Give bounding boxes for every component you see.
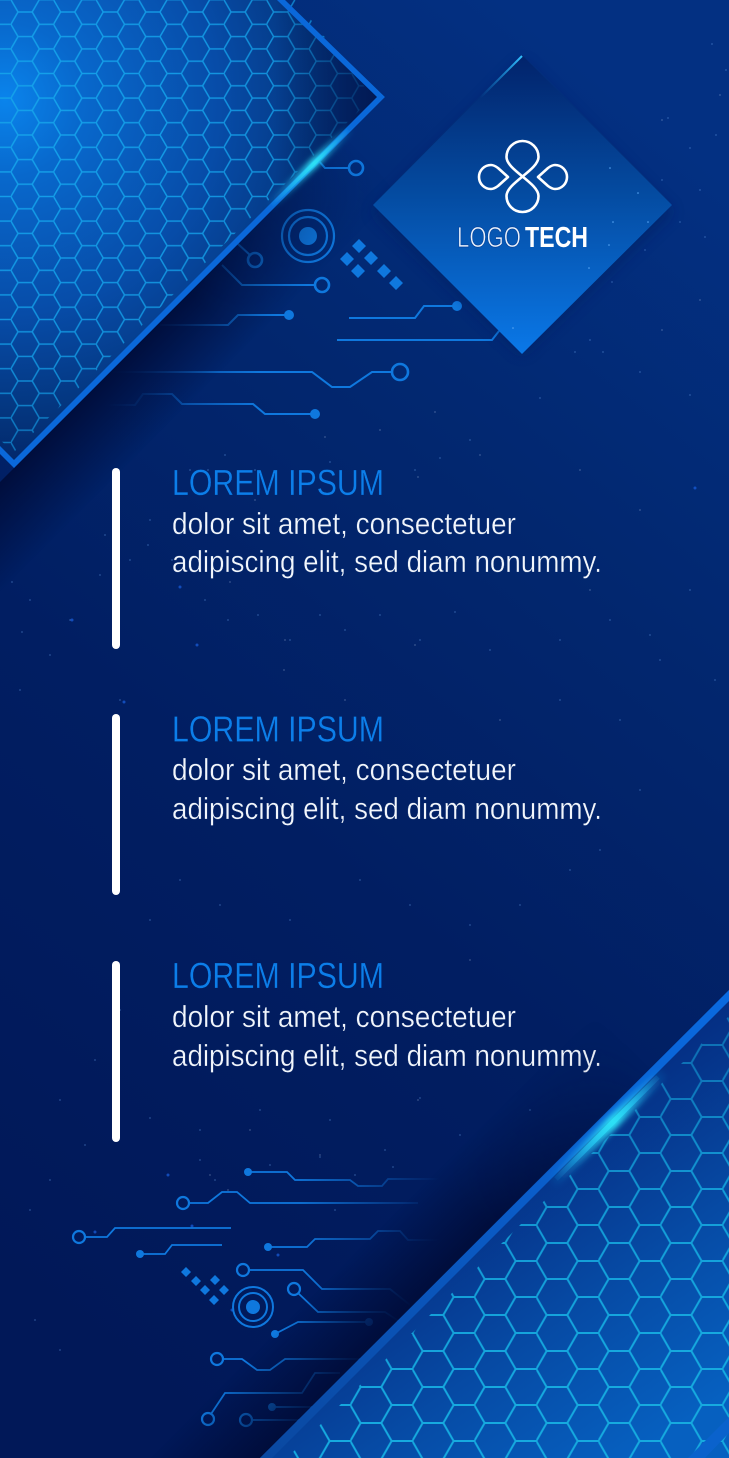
trace b2 xyxy=(177,1192,418,1209)
trace b5 xyxy=(264,1231,450,1251)
panel frame xyxy=(0,0,385,468)
trace b3 xyxy=(73,1228,231,1243)
bottom panel frame xyxy=(260,990,729,1458)
trace: long dot xyxy=(100,394,320,419)
trace b8 xyxy=(271,1318,373,1338)
icon: diamond dots xyxy=(340,239,403,290)
logo wordmark: TECH xyxy=(525,222,588,254)
trace b9 xyxy=(211,1353,360,1370)
heading 2: LOREM IPSUM xyxy=(172,708,384,750)
trace: ring right of glow xyxy=(318,160,363,175)
edge glow xyxy=(268,126,352,208)
divider bar 1 xyxy=(112,468,120,649)
divider bar 2 xyxy=(112,714,120,895)
trace b10 xyxy=(202,1373,340,1425)
panel: bottom-right hexagon corner xyxy=(260,990,729,1458)
icon: bottom diamond dots xyxy=(181,1267,229,1305)
divider bar 3 xyxy=(112,961,120,1142)
hexagon mesh xyxy=(0,0,373,452)
trace: dot by logo xyxy=(349,301,462,318)
trace b11 xyxy=(268,1403,312,1411)
logo panel stars xyxy=(513,168,648,328)
trace: ring lower xyxy=(222,265,329,292)
section 1 xyxy=(112,462,602,649)
heading 3: LOREM IPSUM xyxy=(172,955,384,996)
trace: long ring xyxy=(110,364,408,387)
trace: short ring xyxy=(238,244,262,267)
trace b4 xyxy=(136,1245,222,1258)
body 3: dolor sit amet, consectetuer xyxy=(172,999,516,1034)
trace: dot left xyxy=(160,310,294,325)
bottom edge glow xyxy=(550,1070,665,1185)
trace b1 xyxy=(244,1168,450,1186)
icon: bottom target rings xyxy=(233,1287,273,1327)
right corner darkening xyxy=(275,0,385,207)
heading 1: LOREM IPSUM xyxy=(172,462,384,503)
body 1: adipiscing elit, sed diam nonummy. xyxy=(172,544,602,579)
bottom hexagon mesh xyxy=(287,1016,729,1458)
logo wordmark: LOGO xyxy=(457,222,521,254)
body 2: adipiscing elit, sed diam nonummy. xyxy=(172,791,602,826)
bottom-right panel shadow xyxy=(180,1050,616,1458)
trace: line under logo xyxy=(337,331,499,340)
trace b7 xyxy=(288,1283,400,1322)
bottom circuit traces xyxy=(73,1168,450,1426)
icon: logo knot xyxy=(479,141,567,212)
panel: top-left hexagon diamond xyxy=(0,0,385,468)
body 3: adipiscing elit, sed diam nonummy. xyxy=(172,1038,602,1073)
top-left panel shadow xyxy=(0,162,354,570)
body 2: dolor sit amet, consectetuer xyxy=(172,752,516,787)
logo edge glow xyxy=(480,56,522,98)
bottom corner frame xyxy=(688,1417,729,1458)
section 3 xyxy=(112,955,602,1142)
section 2 xyxy=(112,708,602,895)
trace b12 xyxy=(240,1414,302,1426)
logo diamond panel xyxy=(373,55,672,354)
trace b6 xyxy=(237,1264,410,1305)
top circuit traces xyxy=(100,160,499,419)
body 1: dolor sit amet, consectetuer xyxy=(172,506,516,541)
icon: target rings xyxy=(282,210,334,262)
